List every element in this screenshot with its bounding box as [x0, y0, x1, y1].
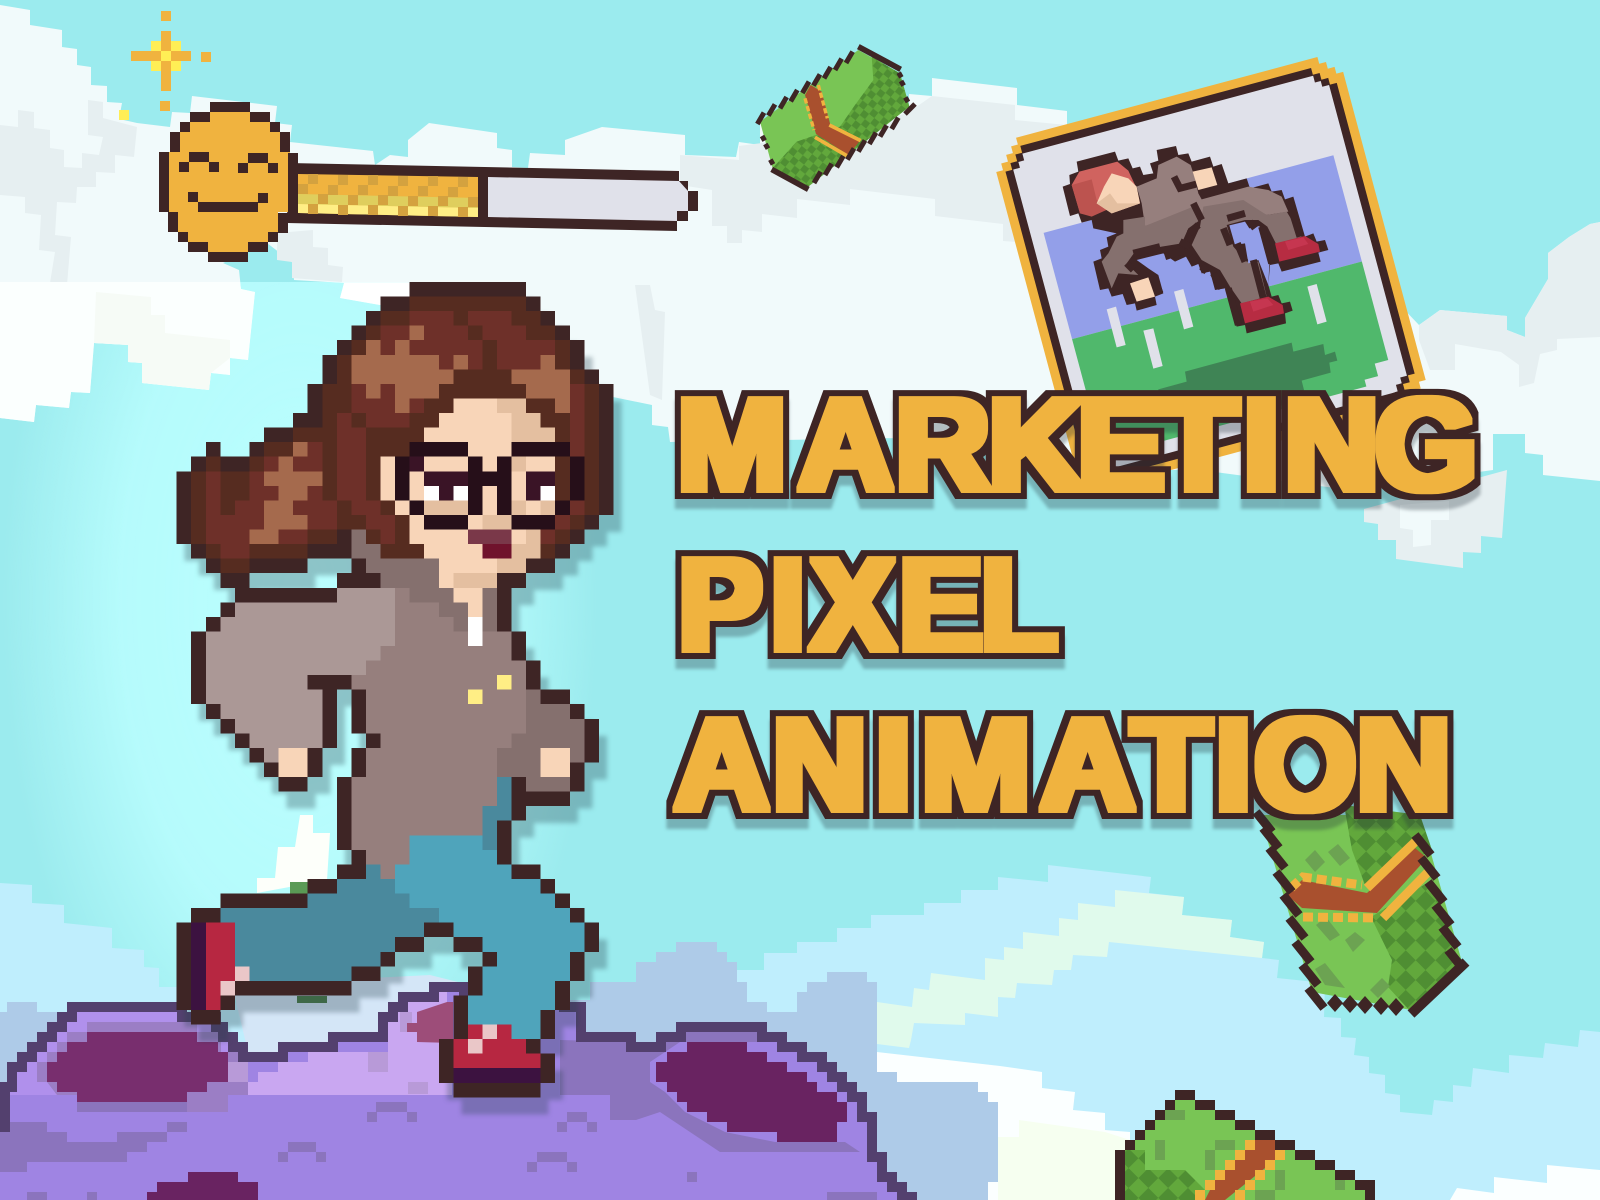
hair highlight — [249, 333, 570, 537]
speed lines — [1107, 284, 1327, 369]
money right toothed edges — [1256, 812, 1464, 1008]
money bottom faded marks — [1155, 1110, 1345, 1200]
smiley mouth — [188, 192, 268, 212]
money right corner — [1411, 962, 1466, 1014]
progress bar — [287, 163, 698, 231]
photo card — [989, 52, 1431, 494]
smiley outline — [159, 102, 298, 262]
money bottom checker — [1125, 1150, 1205, 1200]
money bottom band — [1205, 1140, 1275, 1200]
card sky — [1044, 155, 1362, 339]
money right bottom teeth — [1327, 994, 1404, 1016]
hair red — [206, 318, 584, 551]
outline — [177, 289, 613, 1090]
smiley face — [159, 102, 298, 262]
lavender cloud right — [560, 942, 998, 1200]
title line 2: PIXEL — [678, 532, 1058, 679]
money right faded marks — [1305, 844, 1390, 998]
figure inner lines — [1127, 177, 1300, 325]
money behind character — [290, 882, 327, 1003]
skin shadow — [424, 406, 555, 580]
white cloud bottom right — [1450, 1165, 1600, 1200]
title line 3: ANIMATION — [674, 691, 1451, 838]
gap between legs — [1229, 222, 1269, 285]
money bundle bottom — [1115, 1090, 1375, 1200]
money bundle right — [1256, 805, 1466, 1016]
sparkle — [119, 11, 211, 120]
card paper — [1010, 72, 1410, 473]
figure hands — [1193, 167, 1217, 190]
eye whites and collar — [424, 493, 555, 639]
planet highlight — [248, 992, 452, 1095]
shirt light — [206, 595, 395, 755]
figure hair — [1072, 162, 1140, 215]
jeans light — [395, 843, 584, 1032]
planet bumps — [27, 1102, 877, 1200]
glasses — [395, 449, 584, 522]
lower blue cloud — [0, 865, 1600, 1200]
eyes — [410, 464, 555, 493]
card dark frame — [1000, 63, 1420, 483]
planet shade around crater — [37, 1022, 248, 1112]
shoes red — [206, 930, 541, 1061]
white cloud tuft behind legs — [257, 815, 330, 893]
ground shadow — [1158, 343, 1337, 407]
money right band — [1287, 848, 1427, 913]
title — [674, 371, 1478, 838]
lavender cloud behind planet — [0, 1002, 57, 1200]
planet highlight shade — [228, 1012, 428, 1094]
white cloud bottom — [877, 1052, 1130, 1200]
shoes sole — [191, 930, 541, 1076]
jumping figure on card — [1063, 146, 1337, 407]
planet shade lower left — [0, 1102, 187, 1172]
upper cloud bank — [0, 5, 1600, 568]
pale cloud between legs — [232, 975, 470, 1060]
planet outline — [0, 982, 917, 1200]
figure leg — [1192, 200, 1302, 303]
pixel character — [177, 289, 613, 1090]
shoes laces — [220, 974, 497, 1046]
lips — [468, 536, 512, 538]
smiley eyes — [179, 152, 278, 173]
ivory cloud bottom — [998, 1120, 1130, 1200]
light glow on sky — [0, 282, 700, 1200]
band — [805, 85, 861, 155]
jeans dark — [220, 784, 512, 974]
card grass — [1072, 261, 1393, 457]
crater left — [47, 1032, 228, 1102]
figure face — [1097, 173, 1140, 213]
title line 1: MARKETING — [677, 371, 1478, 518]
shirt buttons — [468, 682, 512, 697]
toothed edges — [757, 52, 915, 183]
card gold frame — [989, 52, 1431, 494]
crater bottom — [147, 1172, 258, 1200]
shirt dark — [351, 537, 584, 784]
hair base — [191, 304, 599, 566]
bright cloud lump left — [0, 282, 420, 422]
crater right — [656, 1042, 847, 1142]
mint cloud — [877, 890, 1264, 1048]
figure shirt lower — [1102, 207, 1200, 288]
planet shade right — [560, 1032, 860, 1152]
crater small rosy — [407, 1002, 453, 1043]
figure outline — [1063, 146, 1328, 333]
shirt mid — [351, 595, 526, 872]
planet rim upper left — [10, 1012, 228, 1095]
figure shoes — [1275, 236, 1320, 262]
mouth — [482, 550, 512, 552]
skin — [279, 406, 570, 770]
purple planet — [0, 975, 925, 1200]
figure shirt upper — [1137, 157, 1288, 226]
solid edges — [772, 47, 901, 189]
money bundle top — [757, 47, 915, 189]
